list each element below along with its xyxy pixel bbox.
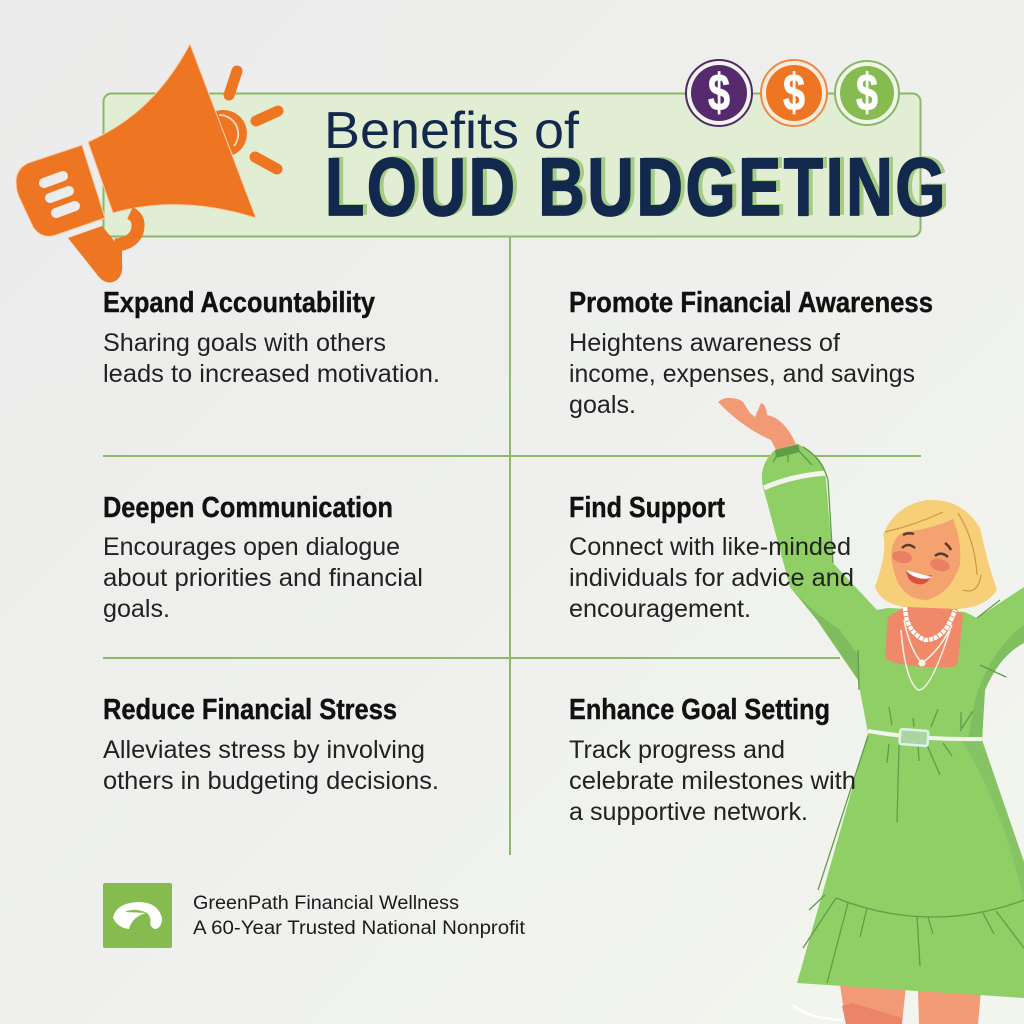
- cell: Find Support: Connect with like-minded: [569, 533, 851, 561]
- sleeve stripe: [764, 473, 826, 488]
- cell: Promote Financial Awareness: [569, 287, 933, 419]
- face: [891, 519, 960, 600]
- cell: Reduce Financial Stress: Reduce Financial Stress: [103, 694, 397, 726]
- cell: Expand Accountability: Expand Accountability: [103, 287, 375, 319]
- cell: Enhance Goal Setting: celebrate milestones with: [569, 767, 856, 795]
- cell: Expand Accountability: [103, 287, 440, 388]
- cell: Enhance Goal Setting: [569, 694, 856, 826]
- icon: orange coin: [761, 60, 827, 126]
- icon: orange coin: $: [783, 64, 805, 122]
- footer text: A 60-Year Trusted National Nonprofit: [193, 918, 526, 939]
- cell: Reduce Financial Stress: Alleviates stress by involving: [103, 736, 425, 764]
- cell: Deepen Communication: goals.: [103, 595, 170, 623]
- hair: [875, 500, 997, 609]
- cell: Promote Financial Awareness: Heightens awareness of: [569, 329, 840, 357]
- cell: Deepen Communication: [103, 492, 423, 623]
- icon: GreenPath logo: [103, 883, 172, 948]
- cell: Find Support: encouragement.: [569, 595, 751, 623]
- title line: Benefits of: Benefits of: [324, 102, 580, 160]
- icons: dollar coins: [686, 60, 899, 126]
- cell: Deepen Communication: about priorities and financial: [103, 564, 423, 592]
- dress: [762, 444, 1024, 740]
- cell: Expand Accountability: leads to increased motivation.: [103, 360, 440, 388]
- cell: Promote Financial Awareness: Promote Financial Awareness: [569, 287, 933, 319]
- legs: [840, 985, 906, 1024]
- icon: green coin: $: [856, 64, 878, 122]
- illustration: cheering woman in green dress: [718, 398, 1024, 1024]
- cell: Find Support: [569, 492, 854, 623]
- footer text: [193, 893, 526, 939]
- cell: Expand Accountability: Sharing goals with others: [103, 329, 386, 357]
- cell: Deepen Communication: Deepen Communication: [103, 492, 393, 524]
- necklaces: [905, 607, 955, 640]
- cell: Enhance Goal Setting: Track progress and: [569, 736, 785, 764]
- title: [324, 102, 952, 233]
- icon: purple coin: [686, 60, 752, 126]
- icon: purple coin: $: [708, 64, 730, 122]
- cell: Enhance Goal Setting: a supportive network.: [569, 798, 808, 826]
- neck and chest: [885, 590, 963, 667]
- title banner panel: [104, 94, 920, 236]
- icon: orange megaphone: [16, 44, 278, 282]
- dress fold lines: [773, 447, 1024, 983]
- icon: green coin: [835, 61, 899, 125]
- cell: Enhance Goal Setting: Enhance Goal Setting: [569, 694, 830, 726]
- cell: Reduce Financial Stress: [103, 694, 439, 795]
- cell: Promote Financial Awareness: income, expenses, and savings: [569, 360, 915, 388]
- cell: Find Support: Find Support: [569, 492, 725, 524]
- mouth: [906, 570, 932, 584]
- cell: Promote Financial Awareness: goals.: [569, 391, 636, 419]
- cell: Reduce Financial Stress: others in budgeting decisions.: [103, 767, 439, 795]
- footer text: GreenPath Financial Wellness: [193, 893, 459, 914]
- cell: Deepen Communication: Encourages open dialogue: [103, 533, 400, 561]
- belt: [868, 731, 982, 739]
- cell: Find Support: individuals for advice and: [569, 564, 854, 592]
- raised hand: [718, 398, 796, 450]
